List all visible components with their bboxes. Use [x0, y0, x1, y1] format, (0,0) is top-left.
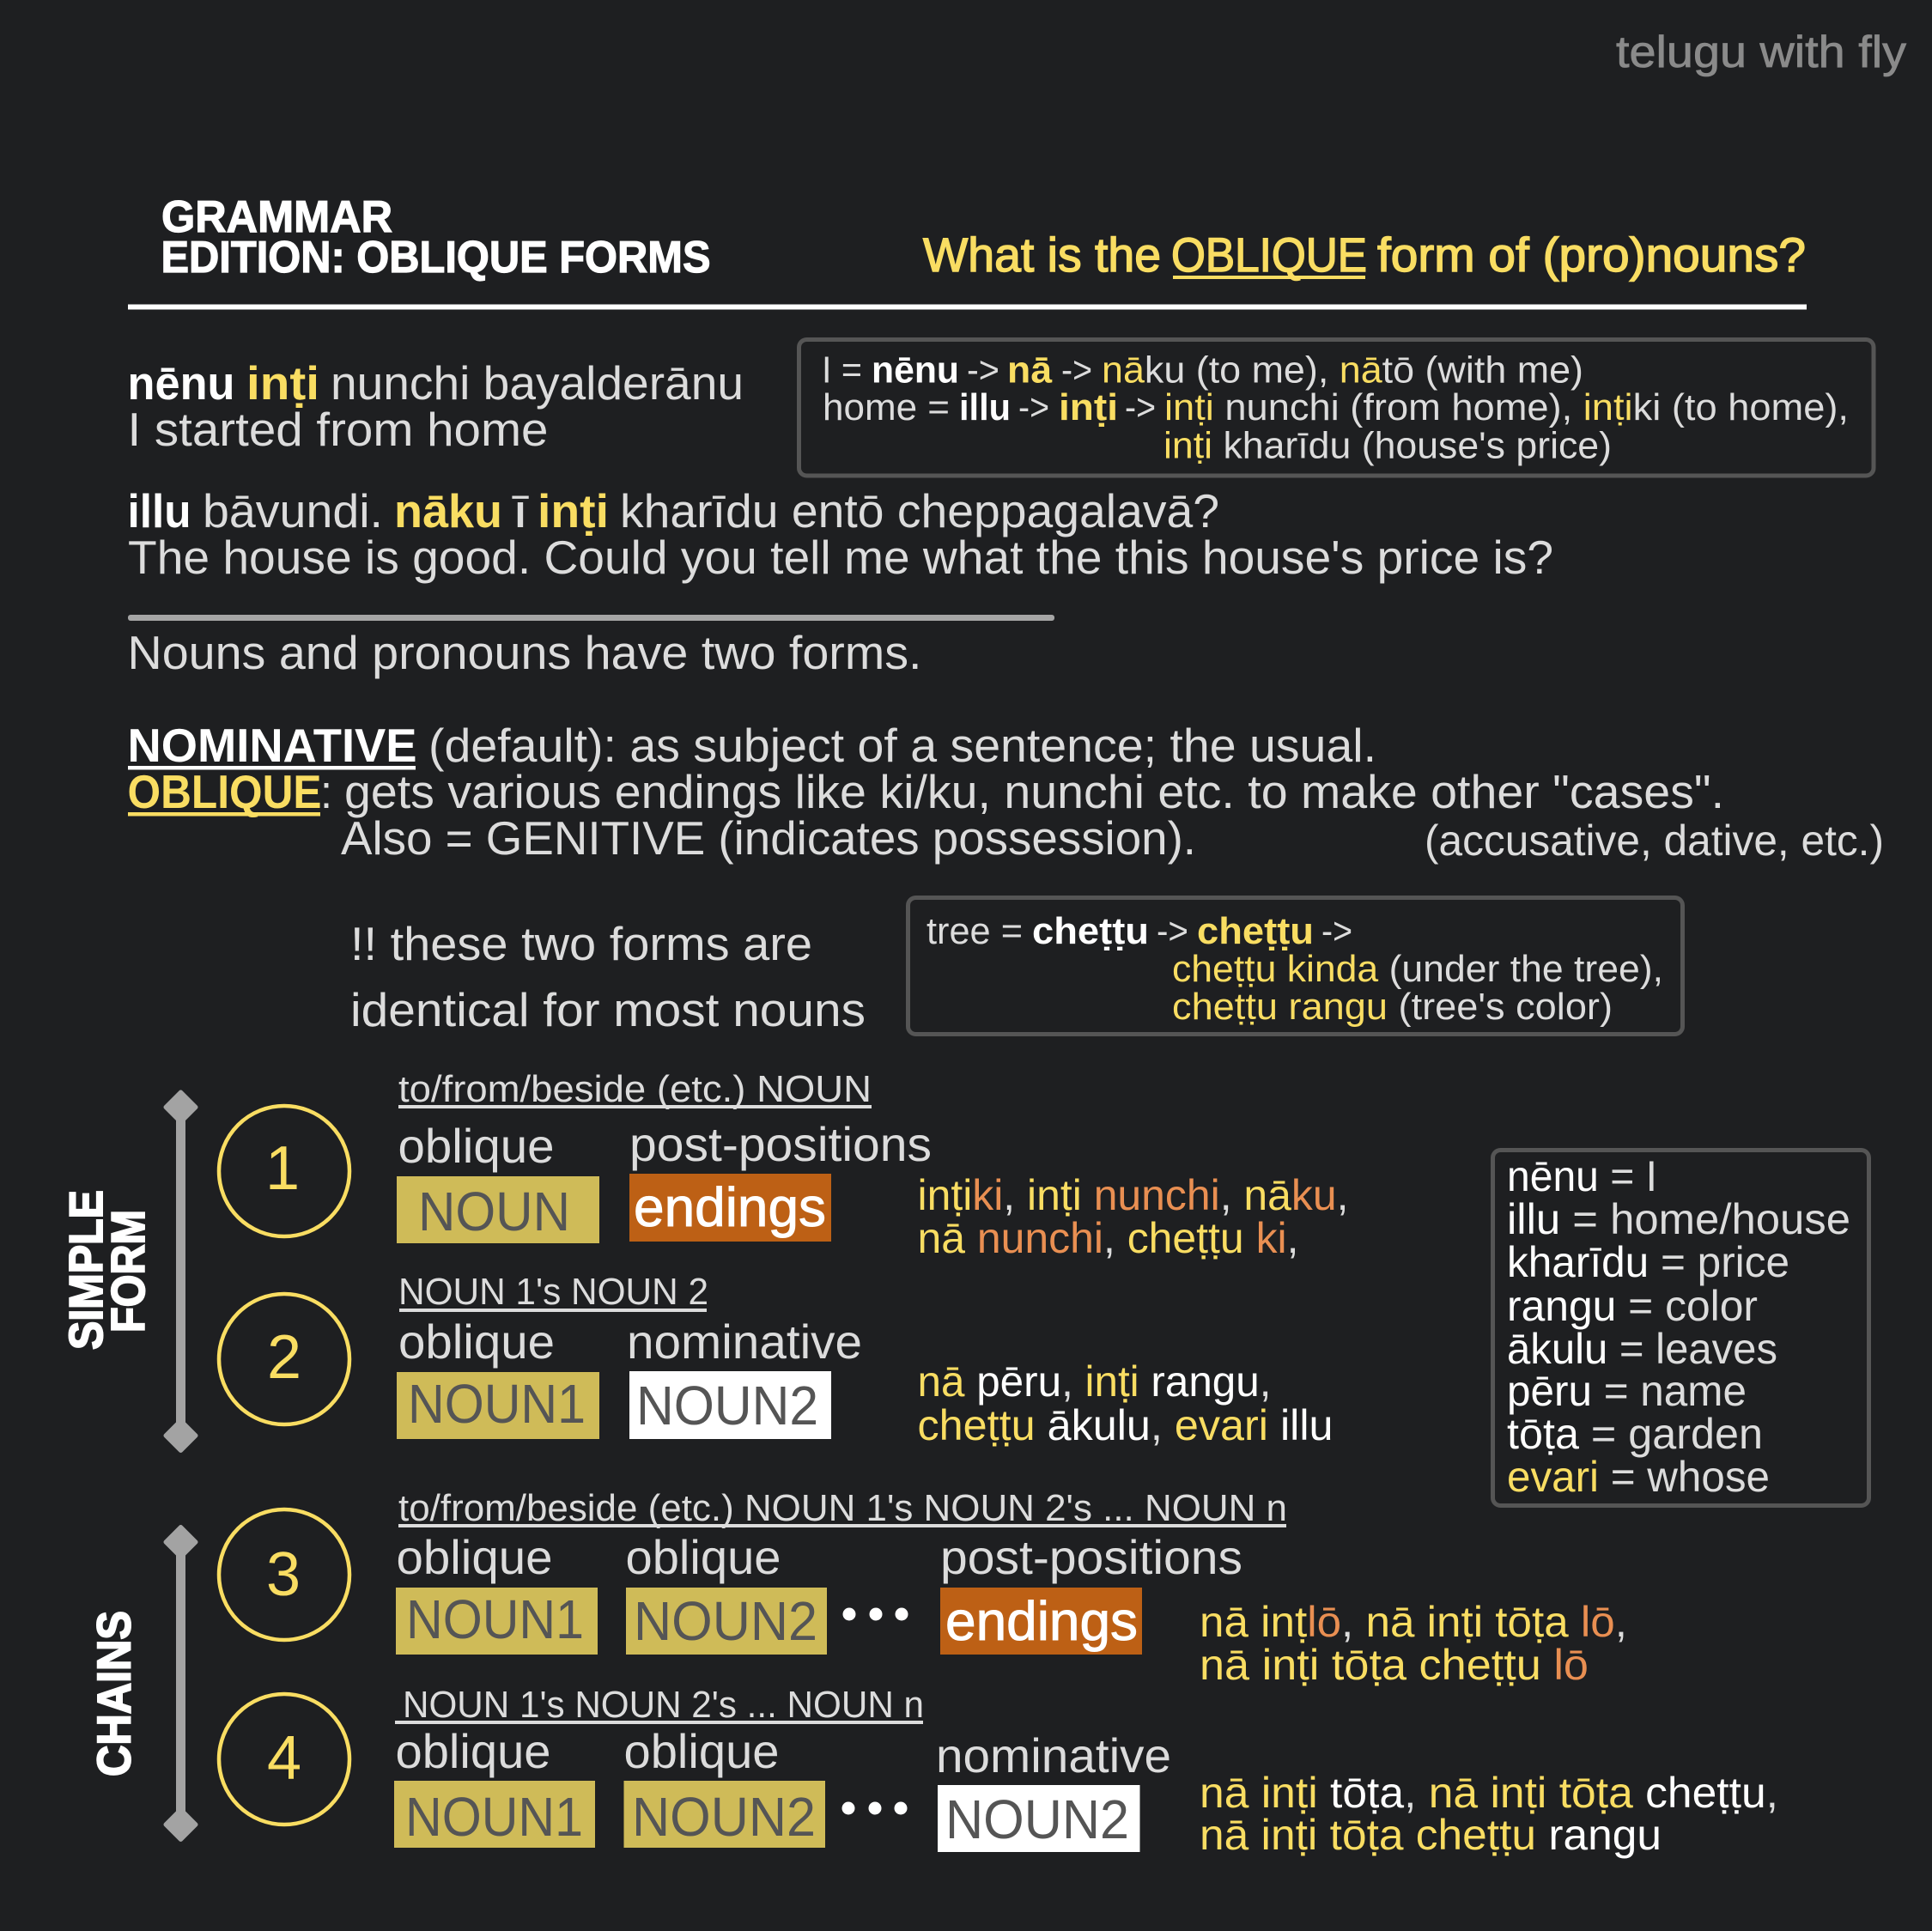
pattern 1: endings [634, 1176, 826, 1238]
pattern 2: nominative [627, 1315, 862, 1369]
box: pronoun and noun forms: I = [822, 349, 862, 392]
label: chains: CHAINS [88, 1611, 141, 1776]
box: pronoun and noun forms: home = [823, 386, 950, 428]
box: pronoun and noun forms: inṭi [1059, 386, 1118, 428]
pattern 4 [394, 1684, 1171, 1852]
box: pronoun and noun forms: -> [967, 349, 999, 392]
pattern 2 [397, 1271, 862, 1439]
box: vocabulary: nēnu = I [1507, 1152, 1657, 1200]
box: pronoun and noun forms: nēnu [872, 349, 959, 392]
pattern 1 [397, 1068, 932, 1243]
box: pronoun and noun forms [799, 340, 1874, 476]
pattern 3: post-positions [940, 1530, 1242, 1584]
example sentence 2: The house is good. Could you tell me what the this house's price is? [128, 531, 1553, 584]
box: vocabulary: illu = home/house [1507, 1195, 1850, 1243]
example sentence 2 [127, 484, 1553, 584]
pattern 1 examples: inṭiki, inṭi nunchi, nāku, [917, 1171, 1348, 1219]
box: vocabulary: rangu = color [1507, 1282, 1758, 1330]
pattern 4 examples: nā inṭi tōṭa cheṭṭu rangu [1200, 1811, 1662, 1859]
label: simple form: FORM [101, 1210, 155, 1333]
title [161, 192, 711, 282]
pattern 2: NOUN1 [408, 1373, 586, 1435]
example sentence 2: kharīdu entō cheppagalavā? [620, 484, 1219, 537]
box: tree example: cheṭṭu [1032, 910, 1149, 952]
heading question: What is the [923, 228, 1161, 282]
pattern 3 examples [1200, 1598, 1627, 1689]
pattern 3: to/from/beside (etc.) NOUN 1's NOUN 2's ... NOUN n [398, 1487, 1287, 1529]
pattern 1: post-positions [629, 1117, 932, 1171]
pattern 2 number [219, 1294, 349, 1424]
pattern 3: oblique [625, 1530, 781, 1584]
title: EDITION: OBLIQUE FORMS [161, 233, 711, 282]
box: pronoun and noun forms: -> [1125, 386, 1156, 428]
example sentence 1 [127, 356, 744, 456]
pattern 4: oblique [623, 1724, 780, 1778]
pattern 4: nominative [936, 1728, 1171, 1782]
axis: chains [166, 1527, 196, 1839]
pattern 3: oblique [397, 1530, 553, 1584]
pattern 1: NOUN [418, 1181, 570, 1242]
pattern 4: NOUN1 [405, 1786, 583, 1848]
pattern 3 [396, 1487, 1287, 1655]
pattern 2 number: 2 [267, 1323, 301, 1392]
definitions: nominative and oblique: NOMINATIVE [127, 719, 417, 772]
example sentence 2: bāvundi. [203, 484, 383, 537]
pattern 3: NOUN1 [406, 1588, 584, 1650]
pattern 4: NOUN 1's NOUN 2's ... NOUN n [403, 1684, 924, 1726]
definitions: nominative and oblique: OBLIQUE [127, 765, 321, 818]
example sentence 1: nunchi bayalderānu [331, 356, 744, 410]
pattern 2 examples: cheṭṭu ākulu, evari illu [917, 1401, 1333, 1449]
pattern 3 examples: nā inṭlō, nā inṭi tōṭa lō, [1200, 1598, 1627, 1646]
box: pronoun and noun forms: nā [1007, 349, 1053, 392]
pattern 2: NOUN 1's NOUN 2 [398, 1271, 708, 1313]
box: pronoun and noun forms: illu [959, 386, 1011, 428]
heading question: form of (pro)nouns? [1377, 228, 1806, 282]
heading question: OBLIQUE [1171, 228, 1367, 282]
pattern 4: NOUN2 [632, 1786, 816, 1848]
label: simple form [59, 1190, 155, 1350]
pattern 2: oblique [398, 1315, 555, 1369]
definitions: nominative and oblique: gets various endings like ki/ku, nunchi etc. to make other "cases". [344, 765, 1724, 818]
pattern 3 number: 3 [266, 1540, 301, 1609]
box: pronoun and noun forms: nāku (to me), nātō (with me) [1102, 349, 1583, 392]
box: tree example: cheṭṭu [1197, 910, 1314, 952]
pattern 2 examples: nā pēru, inṭi rangu, [917, 1357, 1271, 1406]
box: pronoun and noun forms: inṭi nunchi (from home), inṭiki (to home), [1164, 386, 1849, 428]
note: identical forms [350, 917, 866, 1036]
axis: simple form [166, 1092, 196, 1451]
box: tree example: cheṭṭu kinda (under the tree), [1172, 948, 1663, 990]
pattern 4 examples [1200, 1769, 1778, 1859]
box: vocabulary: kharīdu = price [1507, 1238, 1789, 1286]
pattern 2 examples [917, 1357, 1333, 1449]
definitions: nominative and oblique: : [320, 765, 332, 818]
box: vocabulary [1492, 1151, 1868, 1506]
pattern 1 examples [917, 1171, 1348, 1262]
definitions: nominative and oblique: Also = GENITIVE (indicates possession). [341, 811, 1196, 865]
intro text: Nouns and pronouns have two forms. [127, 626, 922, 679]
pattern 1 examples: nā nunchi, cheṭṭu ki, [917, 1214, 1298, 1262]
box: tree example: cheṭṭu rangu (tree's color) [1172, 986, 1613, 1028]
box: tree example: -> [1157, 910, 1188, 952]
box: pronoun and noun forms: inṭi kharīdu (house's price) [1163, 424, 1612, 467]
pattern 1: to/from/beside (etc.) NOUN [398, 1068, 872, 1110]
example sentence 2: nāku [394, 484, 502, 537]
example sentence 2: illu [127, 484, 191, 537]
pattern 4: NOUN2 [945, 1788, 1129, 1850]
pattern 1: oblique [398, 1119, 555, 1173]
pattern 3: NOUN2 [634, 1590, 817, 1652]
pattern 3: endings [945, 1590, 1138, 1652]
pattern 4 examples: nā inṭi tōṭa, nā inṭi tōṭa cheṭṭu, [1200, 1769, 1778, 1817]
example sentence 2: inṭi [538, 484, 609, 537]
example sentence 1: I started from home [127, 403, 548, 456]
box: tree example: -> [1321, 910, 1352, 952]
definitions: nominative and oblique: (default): as subject of a sentence; the usual. [428, 719, 1376, 772]
title: GRAMMAR [161, 192, 392, 242]
box: tree example: tree = [927, 910, 1023, 952]
pattern 4 number [219, 1694, 349, 1825]
pattern 1 number: 1 [265, 1134, 300, 1203]
box: vocabulary: evari = whose [1507, 1453, 1770, 1501]
pattern 4: oblique [395, 1724, 551, 1778]
example sentence 2: ī [512, 484, 530, 537]
box: tree example [908, 898, 1683, 1034]
pattern 2: NOUN2 [636, 1375, 818, 1436]
box: vocabulary: tōṭa = garden [1507, 1410, 1763, 1458]
box: pronoun and noun forms: -> [1018, 386, 1049, 428]
label: simple form: SIMPLE [59, 1190, 112, 1350]
note: identical forms: !! these two forms are [350, 917, 812, 970]
definitions: nominative and oblique: (accusative, dative, etc.) [1425, 817, 1884, 865]
example sentence 1: nēnu [127, 356, 235, 410]
note: identical forms: identical for most nouns [350, 983, 866, 1036]
box: vocabulary: ākulu = leaves [1507, 1325, 1777, 1373]
pattern 1 number [219, 1106, 349, 1236]
pattern 4 number: 4 [267, 1724, 301, 1793]
box: pronoun and noun forms: -> [1061, 349, 1092, 392]
pattern 3 examples: nā inṭi tōṭa cheṭṭu lō [1200, 1641, 1589, 1689]
brand label: telugu with fly [1616, 27, 1906, 77]
pattern 3 number [219, 1509, 349, 1640]
definitions: nominative and oblique [127, 719, 1884, 865]
heading question [923, 228, 1806, 282]
example sentence 1: inṭi [246, 356, 319, 410]
box: vocabulary: pēru = name [1507, 1367, 1747, 1415]
